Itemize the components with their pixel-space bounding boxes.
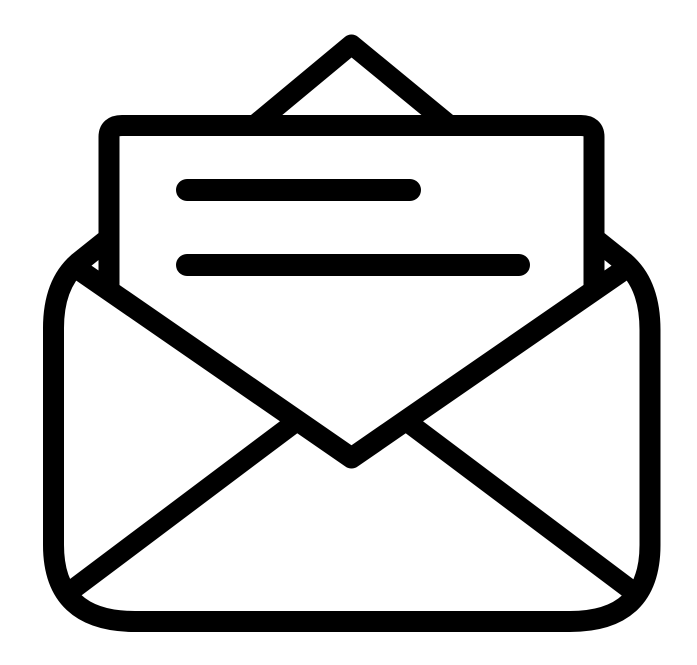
icon: open envelope with letter: [53, 44, 650, 622]
envelope body outline: [53, 239, 650, 622]
envelope lower left fold: [68, 424, 293, 593]
envelope lower right fold: [410, 424, 635, 593]
letter text line 1: [187, 179, 410, 201]
letter sheet: [109, 126, 594, 288]
envelope front flap: [75, 267, 628, 458]
letter text line 2: [187, 254, 519, 276]
envelope back flap peak: [254, 44, 450, 126]
